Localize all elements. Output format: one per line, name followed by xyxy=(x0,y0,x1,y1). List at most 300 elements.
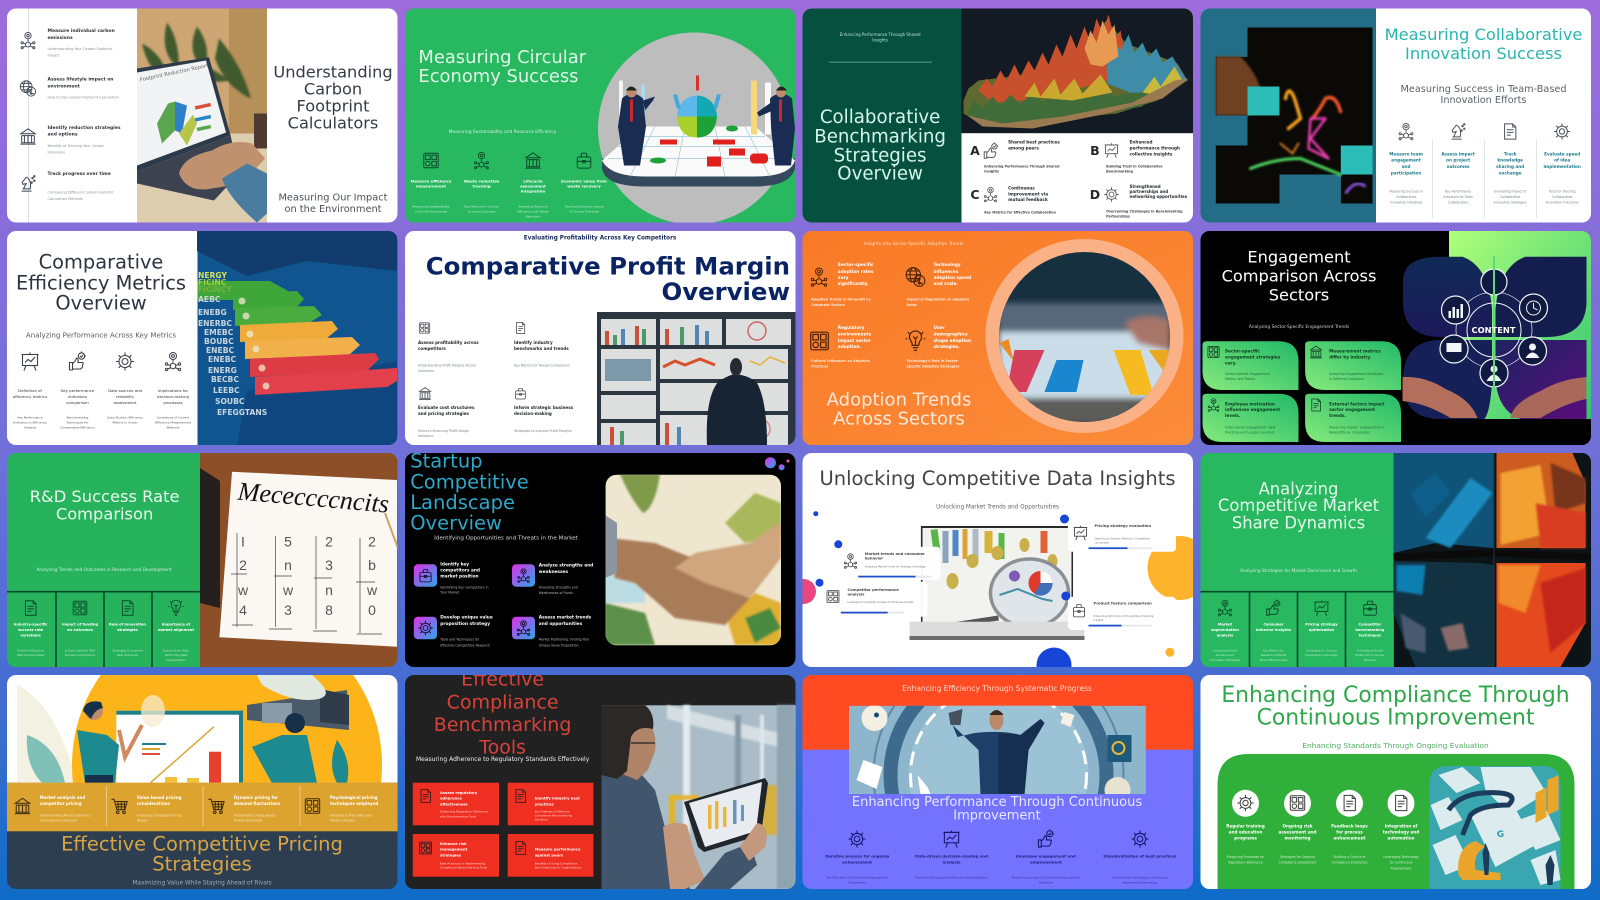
item 1: competitor pricing xyxy=(40,800,82,806)
decorative dots xyxy=(765,457,790,470)
subtitle: Enhancing Performance Through Shared xyxy=(840,32,921,37)
photo: isometric compliance documents: G xyxy=(1497,830,1504,840)
step 4 xyxy=(1383,790,1419,870)
step 1 xyxy=(1226,790,1265,865)
subtitle: Enhancing Standards Through Ongoing Evaluation xyxy=(1302,741,1489,750)
item 1: emissions xyxy=(48,35,73,41)
heading: Comparative Profit Margin xyxy=(426,251,790,280)
label on the photo: BECBC xyxy=(211,374,239,384)
column labels: Key performance xyxy=(61,388,95,392)
column descriptions: Innovation Outcomes xyxy=(1546,200,1579,204)
column descriptions: R&D Outcomes xyxy=(117,653,139,657)
card: pricing strategy: Pricing strategy evaluation xyxy=(1094,524,1151,528)
illustration: team at pricing board xyxy=(7,610,398,900)
icon: bag xyxy=(1364,601,1376,615)
column descriptions: Success Comparisons xyxy=(65,653,96,657)
subtitle: Measuring Adherence to Regulatory Standards Effectively xyxy=(416,756,590,763)
step 1: Regular training xyxy=(1226,823,1265,828)
heading: Calculators xyxy=(288,113,378,132)
item 2: Key Metrics for Margin Comparison xyxy=(514,364,570,368)
icon: growth percent xyxy=(1267,600,1281,615)
item D: networking opportunities xyxy=(1130,194,1188,198)
card 4: sector engagement xyxy=(1329,406,1375,412)
handwritten table: w xyxy=(237,582,249,598)
column descriptions: Improvement Processes xyxy=(1122,880,1158,884)
handwritten table: n xyxy=(284,557,292,573)
card 3: Best Practices in Implementing xyxy=(440,861,485,865)
subtitle: Measuring Sustainability and Resource Efficiency xyxy=(449,129,557,135)
heading: Effective xyxy=(461,668,544,690)
column labels: Implications for xyxy=(158,388,188,392)
handwritten table: 0 xyxy=(368,602,376,618)
card: product feature: Insights xyxy=(1094,618,1104,622)
column descriptions: Indicators for Team xyxy=(1443,195,1473,199)
heading: Economy Success xyxy=(418,66,578,87)
column labels: optimization xyxy=(1309,628,1335,632)
column labels: of idea xyxy=(1554,157,1570,162)
column labels: Lifecycle xyxy=(523,178,543,183)
heading: Benchmarking xyxy=(434,714,571,736)
column labels: Reduction xyxy=(526,214,541,218)
panel: Comparative Efficiency Metrics Overview xyxy=(7,231,398,445)
card 1: Assess regulatory xyxy=(440,791,478,795)
label on the photo: EMEBC xyxy=(204,328,234,336)
item 3: Regulatory xyxy=(838,324,865,330)
step 4: Integration of xyxy=(1385,823,1418,828)
card: competitor performance: Leveraging Competitor Analysis for Business Growth xyxy=(848,600,914,604)
heading: Comparison xyxy=(56,504,153,523)
icon: gear xyxy=(1554,123,1570,140)
icon: presentation board xyxy=(1314,600,1329,616)
heading: Overview xyxy=(410,511,502,534)
step 3: Compliance Excellence xyxy=(1332,861,1367,865)
icon: chess knight xyxy=(22,176,35,191)
label on the photo: ENEBC xyxy=(208,354,237,364)
icon: gear xyxy=(848,830,866,848)
heading: Efficiency Metrics xyxy=(16,271,186,294)
photo: content cycle diagram xyxy=(1402,231,1591,419)
panel: Adoption Trends Across Sectors xyxy=(802,231,1193,445)
heading: Benchmarking xyxy=(814,126,946,147)
item 4 xyxy=(330,794,378,823)
subtitle: Analyzing Performance Across Key Metrics xyxy=(26,330,176,340)
item 3: Tools and Techniques for xyxy=(439,637,480,641)
heading: Effective Competitive Pricing xyxy=(61,832,343,855)
heading: Compliance xyxy=(447,691,559,713)
card 1: Metrics and Trends xyxy=(1225,377,1255,381)
item D: Strengthened xyxy=(1130,184,1161,189)
subtitle: Identifying Opportunities and Threats in the Market xyxy=(434,535,579,541)
item 4: decision-making xyxy=(514,410,552,416)
subtitle: Measuring Our Impact xyxy=(278,192,388,203)
heading: R&D Success Rate xyxy=(30,486,179,506)
label on the photo: FICINCY xyxy=(198,284,232,294)
subtitle: Innovation Efforts xyxy=(1441,95,1526,106)
laptop with magnifier xyxy=(910,526,1084,640)
item 2: Analyzing Strengths and xyxy=(539,585,578,589)
item 4 xyxy=(906,324,971,369)
pricing band xyxy=(7,783,398,831)
item 3: proposition strategy xyxy=(440,620,490,626)
handwritten table: 8 xyxy=(325,602,333,618)
decorative blobs xyxy=(791,511,1212,682)
column descriptions: Share Effectiveness xyxy=(1260,658,1288,662)
panel: Comparative Profit Margin Overview xyxy=(405,231,796,445)
item 1: vary xyxy=(838,274,849,280)
column descriptions: Innovation Strategies xyxy=(1494,200,1527,204)
column descriptions: Collaboration xyxy=(1448,200,1468,204)
column labels: Industry-specific xyxy=(14,623,47,627)
column labels: outcomes xyxy=(1447,164,1470,169)
icon: network pin xyxy=(1399,123,1413,140)
photo: handwritten table on paper: Mececcccncits xyxy=(236,476,390,519)
item 3: demand fluctuations xyxy=(234,800,281,806)
column descriptions: Demand and xyxy=(1216,653,1234,657)
item 2: and scale. xyxy=(934,280,958,286)
item 1 xyxy=(811,262,874,307)
icon: gear xyxy=(1131,830,1149,848)
card 3: Practices and Lessons Learned xyxy=(1225,431,1274,435)
item 4: Comparing Different Carbon Footprint xyxy=(48,190,114,194)
label on the photo: ENERG xyxy=(208,366,237,374)
column labels: knowledge xyxy=(1497,157,1523,162)
item A: A xyxy=(970,143,980,158)
label on the photo: BOUBC xyxy=(204,336,234,346)
column descriptions: Case Studies: Efficiency xyxy=(107,416,143,420)
card 1: adherence xyxy=(440,797,462,801)
item 4: User xyxy=(934,324,945,330)
column labels: participation xyxy=(1391,170,1421,175)
photo: mosaic neon hand xyxy=(1216,28,1372,204)
column descriptions: Techniques for xyxy=(66,421,89,425)
icon: presentation board xyxy=(22,352,38,370)
handwritten table: 5 xyxy=(284,534,292,550)
subtitle: Unlocking Market Trends and Opportunities xyxy=(936,504,1059,510)
item 2: Analyzing Competitor Pricing xyxy=(137,814,182,818)
ring photo xyxy=(986,239,1184,433)
column descriptions: Collaborative xyxy=(1396,195,1416,199)
item 3 xyxy=(234,794,281,823)
item 2: environment xyxy=(48,83,81,89)
card: pricing strategy: Landscapes xyxy=(1094,540,1110,544)
icon: light bulb xyxy=(168,600,184,615)
label on the photo: SOUBC xyxy=(215,396,245,406)
step 2: monitoring xyxy=(1284,835,1311,840)
card 2: Measurement metrics xyxy=(1329,348,1381,353)
icon: bank xyxy=(525,153,541,168)
step 1: Regulatory Adherence xyxy=(1228,861,1263,865)
item 3: environments xyxy=(838,331,872,337)
item 2 xyxy=(48,76,119,100)
column labels: engagement xyxy=(1391,157,1421,162)
column labels: Economy Success xyxy=(468,210,495,214)
card: pricing strategy: Data-Driven Decision Making in Competitive xyxy=(1094,536,1150,540)
step 1: programs xyxy=(1234,835,1257,840)
handwritten table: w xyxy=(366,582,378,598)
item 3: Dynamic pricing for xyxy=(234,794,278,800)
item 3: Benefits of Tracking Your Carbon xyxy=(48,144,104,148)
item C: C xyxy=(970,187,980,202)
heading: Overview xyxy=(661,276,790,306)
item 1: competitors and xyxy=(440,567,480,573)
card 4: Measure performance xyxy=(535,848,581,852)
item 2: adoption speed xyxy=(934,274,971,280)
column descriptions: Frameworks xyxy=(848,880,866,884)
panel: Effective Competitive Pricing Strategies xyxy=(7,610,398,900)
item 3 xyxy=(414,614,493,647)
item 1: Identify key xyxy=(440,561,469,567)
column labels: Iterative process for ongoing xyxy=(825,853,889,858)
heading: Innovation Success xyxy=(1405,43,1562,62)
item 2: Impact of Regulation on Adoption xyxy=(906,297,970,301)
label on the photo: AEBC xyxy=(198,294,221,304)
step 4: Leveraging Technology xyxy=(1383,855,1419,859)
card: competitor performance: analysis xyxy=(848,593,865,597)
column labels: strategies xyxy=(117,628,138,632)
card 2: practices xyxy=(535,802,555,806)
item 1: Identifying Key Competitors in xyxy=(440,585,489,589)
item 4: Unique Value Proposition xyxy=(539,643,579,647)
column labels: variations xyxy=(20,633,41,637)
item 1: adoption rates xyxy=(838,268,874,274)
column labels: behavior insights xyxy=(1256,628,1291,632)
card 2: Compliance Benchmarking xyxy=(535,813,573,817)
photo: engineer with tablet in factory xyxy=(602,705,796,889)
icon: bank xyxy=(20,129,36,144)
item D: D xyxy=(1090,187,1100,202)
column descriptions: Benchmarking xyxy=(67,416,88,420)
subtitle: Analyzing Trends and Outcomes in Research and Development xyxy=(36,567,172,573)
icon: delivery badge xyxy=(1038,830,1054,847)
item 1 xyxy=(418,323,479,373)
item 1: Sector-specific xyxy=(838,262,874,268)
card 2 xyxy=(508,783,593,825)
column descriptions: Forecasting Market xyxy=(1357,648,1384,652)
step 2: assessment and xyxy=(1278,829,1317,834)
column labels: segmentation xyxy=(1211,628,1239,632)
column labels: Impact of funding xyxy=(62,623,98,627)
card 2: differ by industry. xyxy=(1329,354,1372,359)
item 2: weaknesses xyxy=(539,568,568,574)
handwritten table: 2 xyxy=(325,534,333,550)
illustration: circular economy board xyxy=(598,32,795,224)
column descriptions: Collaborative xyxy=(1552,195,1573,199)
column labels: processes xyxy=(163,400,183,404)
column descriptions: Methods xyxy=(167,426,180,430)
item 1: Understanding Market Dynamics xyxy=(40,814,91,818)
icon: network pin xyxy=(475,152,488,169)
item 1: competitors xyxy=(418,346,446,350)
step 2: Compliance Assessment xyxy=(1279,861,1317,865)
green container xyxy=(1218,754,1574,889)
card 4: Benchmarking for Organizations xyxy=(535,866,582,870)
photo: handshake over world map xyxy=(605,474,782,646)
item D: Partnerships xyxy=(1106,214,1130,218)
item 3 xyxy=(48,124,121,154)
diagram label: CONTENT xyxy=(1471,325,1516,335)
item 3: Variations xyxy=(418,434,434,438)
label on the photo: ENERBC xyxy=(198,318,232,328)
column descriptions: Strategies to Improve xyxy=(112,648,143,652)
panel: Collaborative Benchmarking Strategies Overview xyxy=(802,8,1193,222)
card 4: Benefits of Using Compliance xyxy=(535,861,577,865)
item D: Overcoming Challenges in Benchmarking xyxy=(1106,210,1183,214)
column labels: analysis xyxy=(1217,633,1233,637)
item 3: Emissions xyxy=(48,150,65,154)
column descriptions: Competitive Advantage xyxy=(1305,653,1338,657)
label on the photo: NERGY xyxy=(198,270,227,280)
item 3: Factors Influencing Profit Margin xyxy=(418,429,469,433)
item C: Key Metrics for Effective Collaboration xyxy=(984,210,1057,214)
item 2: influences xyxy=(934,268,959,274)
card 1: vary. xyxy=(1225,360,1237,365)
handwritten table: n xyxy=(325,582,333,598)
item B: Enhanced xyxy=(1130,139,1152,144)
item A: Shared best practices xyxy=(1008,139,1060,144)
item 3: and pricing strategies xyxy=(418,410,470,416)
item 4: Calculation Methods xyxy=(48,197,83,201)
subtitle: Analyzing Strategies for Market Dominance and Growth xyxy=(1240,568,1357,573)
column labels: waste recovery xyxy=(567,183,601,188)
item 4: Technology's Role in Sector- xyxy=(906,359,959,363)
column labels: in Circular Economies xyxy=(415,210,448,214)
label on the photo: EFEGGTANS xyxy=(217,408,267,416)
column descriptions: Industry-Specific R&D xyxy=(65,648,95,652)
heading: Strategies xyxy=(152,852,252,875)
icon: bag xyxy=(577,153,591,168)
item 1: Understanding Profit Margins Across xyxy=(418,364,476,368)
card 3: influences engagement xyxy=(1225,406,1280,412)
heading: Measuring Circular xyxy=(418,47,587,68)
column descriptions: Key Performance xyxy=(1445,190,1471,194)
item 3: Effective Competitive Research xyxy=(440,643,490,647)
column labels: techniques xyxy=(1359,633,1381,637)
column descriptions: Tools for Tracking xyxy=(1548,190,1576,194)
card 2: Key Features of Effective xyxy=(535,809,570,813)
step 1: and education xyxy=(1229,829,1262,834)
panel: Enhancing Performance Through Continuous Improvement xyxy=(802,650,1193,900)
heading: Competitive Market xyxy=(1218,496,1380,514)
card 2 xyxy=(1305,341,1401,390)
card: pricing strategy xyxy=(1060,514,1176,552)
item 3: Practices xyxy=(811,365,828,369)
item 2 xyxy=(906,262,971,307)
column descriptions: Analyzing Market xyxy=(1213,648,1238,652)
card: market trends: behavior xyxy=(865,557,883,561)
card 1: engagement strategies xyxy=(1225,354,1281,359)
heading: Unlocking Competitive Data Insights xyxy=(819,467,1176,490)
photo: energy rating arrows xyxy=(197,231,398,445)
handwritten table: 3 xyxy=(325,557,333,573)
handwritten table: b xyxy=(368,557,376,573)
item 3: Pricing Techniques xyxy=(234,819,263,823)
item 2: Technology xyxy=(934,262,961,268)
item 2 xyxy=(512,562,593,595)
icon: document xyxy=(122,601,133,615)
card: market trends: Market trends and consumer xyxy=(865,552,925,556)
subtitle: Measuring Success in Team-Based xyxy=(1401,84,1566,95)
column labels: Measure team xyxy=(1389,151,1424,156)
icon: chess knight xyxy=(1452,124,1465,139)
item 4: Inform strategic business xyxy=(514,404,574,410)
item 1: Measure individual carbon xyxy=(48,28,115,34)
item 3: Develop unique value xyxy=(440,614,493,620)
column labels: on outcomes xyxy=(67,628,93,632)
column labels: reliability xyxy=(116,394,135,398)
item 4: Adapting to Price Wars and xyxy=(330,814,372,818)
heading: Competitive xyxy=(410,470,529,493)
item 1: Market analysis and xyxy=(40,794,85,800)
column descriptions: Key Metrics for xyxy=(1263,648,1285,652)
illustration: businessman and dial xyxy=(849,650,1146,900)
photo: laptop on desk xyxy=(137,8,267,222)
item 3: and options xyxy=(48,131,78,137)
card 4: trends. xyxy=(1329,412,1346,418)
column descriptions: Overcoming Challenges in Continuous xyxy=(1112,875,1168,879)
item 3: impact sector xyxy=(838,338,872,344)
panel: Engagement Comparison Across Sectors xyxy=(1200,231,1591,445)
column labels: Competitor xyxy=(1359,623,1382,627)
column labels: success rate xyxy=(18,628,44,632)
column labels: Assess impact xyxy=(1441,151,1475,156)
column labels: Market xyxy=(1218,623,1232,627)
item B xyxy=(1090,139,1180,174)
column labels xyxy=(410,178,607,218)
panel: Startup Competitive Landscape Overview xyxy=(405,449,796,667)
item 4: techniques employed xyxy=(330,800,378,806)
photo: isometric compliance documents xyxy=(1430,766,1560,889)
item 4 xyxy=(514,388,574,433)
card 1: Enhancing Regulatory Adherence xyxy=(440,810,488,814)
subtitle: Evaluating Profitability Across Key Competitors xyxy=(524,235,677,241)
item C: mutual feedback xyxy=(1008,197,1048,202)
item 1: and Consumer Behavior xyxy=(40,819,78,823)
item 4: strategies. xyxy=(934,344,960,350)
panel: Analyzing Competitive Market Share Dynamics xyxy=(1200,453,1591,667)
item A: Enhancing Performance Through Shared xyxy=(984,164,1060,168)
heading: Sectors xyxy=(1269,285,1329,304)
card: product feature xyxy=(1061,592,1176,630)
step 1: Enhancing Processes for xyxy=(1227,855,1265,859)
card 1: with Benchmarking Tools xyxy=(440,814,477,818)
column labels: Assessing Resource xyxy=(518,204,548,208)
item 3: adoption. xyxy=(838,344,861,350)
column labels: Employee engagement and xyxy=(1016,853,1076,858)
handwritten table: 3 xyxy=(284,602,292,618)
heading: Landscape xyxy=(410,490,515,514)
handwritten table: w xyxy=(282,582,294,598)
column descriptions: Organizations xyxy=(166,658,186,662)
item B: collective insights xyxy=(1130,151,1173,156)
card 3: management xyxy=(440,848,468,852)
column labels: Pricing strategy xyxy=(1305,623,1338,627)
icon: globe dollar xyxy=(906,268,925,286)
column descriptions: Key Performance xyxy=(17,416,43,420)
icon: chips xyxy=(305,799,320,813)
card 4 xyxy=(508,834,593,877)
column descriptions: Measuring Success in Continuous Improvement xyxy=(1012,875,1081,879)
item B: B xyxy=(1090,143,1100,158)
item B: performance through xyxy=(1130,145,1180,150)
card 2: in Different Industries xyxy=(1329,377,1364,381)
icon: network pin xyxy=(165,352,181,371)
heading: Comparative xyxy=(39,250,163,273)
panel: Enhancing Compliance Through Continuous Improvement xyxy=(1200,675,1591,889)
icon: cart xyxy=(111,799,127,814)
column descriptions: Limitations of Current xyxy=(157,416,190,420)
item 2: Rates xyxy=(906,303,917,307)
heading: Strategies xyxy=(834,145,927,166)
